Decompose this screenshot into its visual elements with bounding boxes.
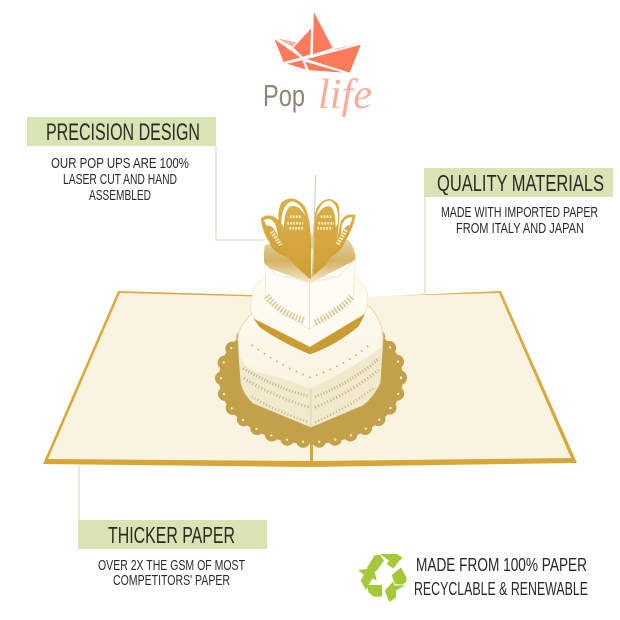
panel: recyclable callout: [358, 554, 588, 602]
body text: COMPETITORS' PAPER: [113, 572, 230, 589]
icon: recycle arrows: [358, 554, 407, 602]
heading band: [78, 520, 267, 549]
cake: middle tier gold edge: [253, 314, 365, 354]
heading band: [27, 117, 216, 146]
body text: ASSEMBLED: [89, 187, 151, 204]
cake, traced in 3x coordinates: [238, 175, 383, 427]
panel: quality materials: [424, 168, 613, 237]
cake: gold crown petals: [261, 198, 356, 279]
doily: gold scalloped base: [219, 312, 403, 444]
heading: THICKER PAPER: [108, 522, 235, 548]
logo: Poplife: [263, 10, 372, 118]
crown lace fans: [287, 217, 304, 228]
body text: [98, 557, 245, 589]
cake: crown centre panel: [294, 248, 326, 277]
body text: [441, 204, 598, 237]
cake: middle tier: [251, 277, 368, 347]
logo word: life: life: [318, 72, 372, 118]
pop-up card: open card with wedding cake: [43, 175, 577, 467]
connector: thicker paper: [78, 465, 80, 520]
crown cut-out crescents: [281, 201, 306, 227]
lace band: [238, 347, 383, 427]
body text: OUR POP UPS ARE 100%: [51, 155, 189, 172]
cake: bottom tier: [238, 307, 383, 427]
body text: OVER 2X THE GSM OF MOST: [98, 557, 245, 574]
connector: quality materials: [424, 197, 426, 294]
cake: top tier inner gold: [264, 233, 356, 283]
heading band: [424, 168, 613, 197]
card cream inside right: [313, 293, 571, 461]
icon: origami paper boat: [273, 10, 362, 73]
card gold backing: [43, 291, 577, 467]
connector: precision design: [216, 146, 265, 240]
panel: thicker paper: [78, 520, 267, 589]
body text: LASER CUT AND HAND: [63, 171, 177, 188]
card cream inside left: [48, 293, 310, 461]
cake: top tier front: [265, 259, 356, 329]
panel: precision design: [27, 117, 216, 204]
body text: [51, 155, 189, 204]
cake: centre paper stem: [313, 175, 316, 277]
text: [414, 555, 588, 599]
heading: PRECISION DESIGN: [46, 119, 200, 146]
logo word: Pop: Pop: [263, 78, 305, 113]
